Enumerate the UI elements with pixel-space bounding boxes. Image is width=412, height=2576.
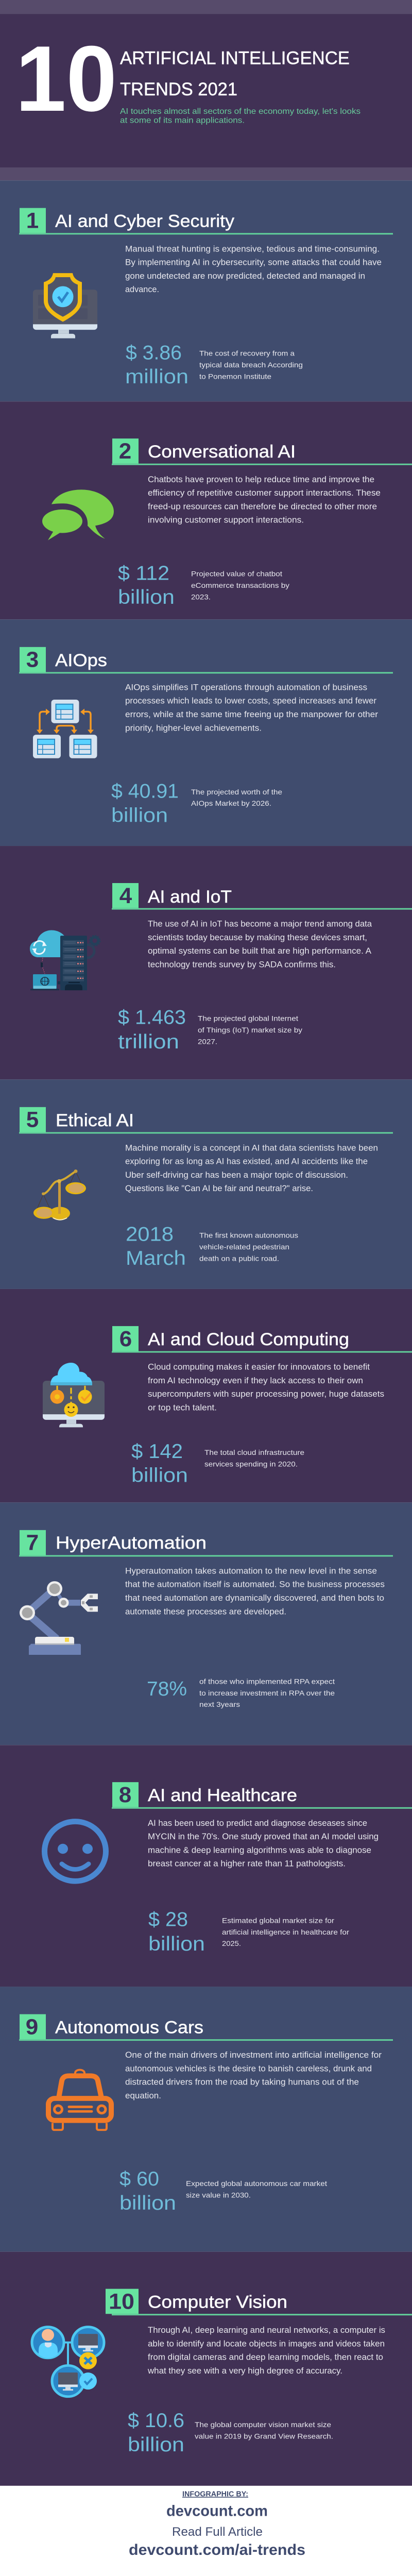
- stat description: vehicle-related pedestrian: [199, 1243, 289, 1251]
- stat description: of Things (IoT) market size by: [198, 1026, 303, 1035]
- body text: AI has been used to predict and diagnose deseases since: [148, 1818, 367, 1828]
- panel: 7 HyperAutomation: [0, 1502, 412, 1745]
- body text: MYCIN in the 70's. One study proved that an AI model using: [148, 1831, 379, 1841]
- stat value: $ 60: [119, 2168, 159, 2190]
- body text: able to identify and locate objects in images and videos taken: [148, 2338, 385, 2348]
- body text: Machine morality is a concept in AI that data scientists have been: [125, 1143, 378, 1153]
- section heading 9: Autonomous Cars: [55, 2018, 203, 2037]
- stat description: to increase investment in RPA over the: [199, 1689, 335, 1698]
- site name: devcount.com: [166, 2503, 268, 2519]
- stat description: The projected global Internet: [198, 1015, 298, 1023]
- stat description: The cost of recovery from a: [199, 350, 295, 358]
- body text: or top tech talent.: [148, 1402, 217, 1412]
- icon: linked data tables: [33, 700, 97, 758]
- body text: scientists today because by making these devices smart,: [148, 932, 367, 942]
- section heading 6: AI and Cloud Computing: [148, 1330, 349, 1349]
- stat description: typical data breach According: [199, 361, 303, 369]
- section heading 5: 5: [26, 1108, 39, 1132]
- body text: automate these processes are developed.: [125, 1606, 286, 1616]
- body text: that need automation are dynamically discovered, and then bots to: [125, 1592, 384, 1603]
- stat value: billion: [111, 804, 168, 826]
- stat description: The total cloud infrastructure: [204, 1449, 304, 1457]
- section heading 6: 6: [119, 1327, 132, 1351]
- section heading 9: 9: [26, 2015, 38, 2039]
- body text: Questions like "Can AI be fair and neutral?" arise.: [125, 1183, 313, 1193]
- stat value: 78%: [147, 1677, 187, 1700]
- body text: [125, 1143, 378, 1193]
- stat description: [195, 2421, 333, 2441]
- icon: shield on monitor: [33, 273, 97, 338]
- stat description: 2023.: [191, 594, 211, 601]
- stat value: trillion: [118, 1031, 179, 1053]
- panel: footer credits: [0, 2486, 412, 2576]
- stat value: $ 1.463: [118, 1006, 186, 1028]
- panel: 5 Ethical AI: [0, 1079, 412, 1289]
- section heading 1: [19, 208, 393, 234]
- stat description: [191, 570, 290, 601]
- body text: involving customer support interactions.: [148, 515, 304, 525]
- panel: 2 Conversational AI: [0, 401, 412, 619]
- stat value: [118, 562, 175, 608]
- icon: smiley face: [44, 1822, 106, 1881]
- section heading 4: 4: [119, 884, 132, 908]
- panel: 1 AI and Cyber Security: [0, 180, 412, 401]
- section heading 5: Ethical AI: [56, 1111, 134, 1130]
- stat description: 2027.: [198, 1038, 217, 1046]
- stat description: death on a public road.: [199, 1255, 279, 1263]
- stat description: size value in 2030.: [186, 2192, 251, 2200]
- body text: exploring for as long as AI has existed, and AI accidents like the: [125, 1156, 368, 1166]
- stat value: $ 40.91: [111, 780, 179, 803]
- stat description: [222, 1917, 349, 1948]
- subtitle: at some of its main applications.: [120, 116, 245, 125]
- section heading 4: [112, 883, 412, 910]
- article link: devcount.com/ai-trends: [129, 2542, 305, 2558]
- stat description: [198, 1015, 303, 1046]
- section heading 10: [106, 2289, 412, 2315]
- read full article label: Read Full Article: [172, 2525, 263, 2539]
- stat description: eCommerce transactions by: [191, 582, 290, 590]
- stat value: $ 142: [131, 1440, 183, 1463]
- section heading 7: 7: [26, 1531, 39, 1555]
- section heading 2: Conversational AI: [148, 443, 296, 462]
- body text: Through AI, deep learning and neural networks, a computer is: [148, 2325, 385, 2335]
- icon: cloud with monitor: [43, 1363, 105, 1427]
- stat description: Expected global autonomous car market: [186, 2180, 327, 2188]
- section heading 9: [19, 2014, 393, 2041]
- panel: header: [0, 0, 412, 180]
- section heading 3: [19, 647, 393, 673]
- body text: from AI technology even if they lack access to their own: [148, 1375, 363, 1385]
- section heading 2: [112, 438, 412, 465]
- stat description: [199, 350, 303, 381]
- stat description: value in 2019 by Grand View Research.: [195, 2433, 333, 2441]
- body text: errors, while at the same time freeing up the manpower for other: [125, 709, 378, 719]
- body text: autonomous vehicles is the desire to banish careless, drunk and: [125, 2063, 372, 2073]
- stat description: The projected worth of the: [191, 788, 282, 796]
- body text: technology trends survey by SADA confirms this.: [148, 959, 336, 969]
- panel: 3 AIOps: [0, 619, 412, 846]
- section heading 10: 10: [109, 2290, 134, 2314]
- body text: optimal systems can be built that are high performance. A: [148, 945, 371, 956]
- section heading 3: 3: [26, 648, 39, 672]
- stat description: [186, 2180, 327, 2200]
- stat value: [148, 1908, 205, 1955]
- stat value: billion: [148, 1933, 205, 1955]
- stat description: The first known autonomous: [199, 1232, 298, 1240]
- body text: [148, 1362, 384, 1412]
- body text: breast cancer at a higher rate than 11 pathologists.: [148, 1858, 346, 1869]
- body text: advance.: [125, 284, 159, 294]
- body text: [147, 2325, 385, 2376]
- stat value: $ 28: [148, 1908, 188, 1930]
- body text: processes which leads to lower costs, speed increases and fewer: [125, 696, 376, 706]
- body text: [148, 474, 381, 525]
- stat description: services spending in 2020.: [204, 1460, 298, 1468]
- body text: Chatbots have proven to help reduce time and improve the: [148, 474, 374, 484]
- body text: freed-up resources can therefore be directed to other more: [148, 501, 377, 511]
- body text: machine & deep learning algorithms was able to diagnose: [148, 1845, 371, 1855]
- section heading 6: [112, 1326, 412, 1352]
- body text: from digital cameras and deep learning models, then react to: [148, 2352, 383, 2362]
- title: ARTIFICIAL INTELLIGENCE: [120, 48, 350, 68]
- body text: gone undetected are now predicted, detected and managed in: [125, 270, 365, 281]
- stat value: March: [126, 1247, 186, 1269]
- big number 10: 10: [15, 26, 117, 130]
- body text: [125, 682, 378, 733]
- subtitle: [120, 107, 360, 125]
- body text: that the automation itself is automated. So the business processes: [125, 1579, 385, 1589]
- panel: 4 AI and IoT: [0, 846, 412, 1079]
- stat description: of those who implemented RPA expect: [199, 1678, 335, 1686]
- stat value: 2018: [126, 1223, 174, 1245]
- stat description: [204, 1449, 304, 1468]
- body text: [148, 919, 372, 969]
- icon: cloud server and laptop: [30, 930, 100, 990]
- stat description: [199, 1678, 335, 1709]
- subtitle: AI touches almost all sectors of the economy today, let's looks: [120, 107, 360, 116]
- panel: 10 Computer Vision: [0, 2252, 412, 2486]
- stat value: [119, 2168, 176, 2214]
- panel: 9 Autonomous Cars: [0, 1987, 412, 2252]
- section heading 2: 2: [119, 439, 131, 464]
- credit label: INFOGRAPHIC BY:: [182, 2490, 248, 2498]
- stat description: [199, 1232, 298, 1263]
- body text: [125, 1566, 385, 1616]
- section heading 1: 1: [26, 209, 39, 233]
- body text: supercomputers with super processing power, huge datasets: [148, 1388, 384, 1399]
- icon: golden scales: [33, 1170, 86, 1220]
- title: TRENDS 2021: [120, 79, 237, 99]
- body text: efficiency of repetitive customer support interactions. These: [148, 487, 381, 498]
- body text: priority, higher-level achievements.: [125, 723, 262, 733]
- stat value: [128, 2410, 184, 2456]
- body text: [125, 2049, 382, 2100]
- section heading 4: AI and IoT: [148, 887, 232, 907]
- stat description: to Ponemon Institute: [199, 373, 271, 381]
- section heading 8: AI and Healthcare: [148, 1786, 297, 1805]
- body text: [148, 1818, 379, 1869]
- stat description: The global computer vision market size: [195, 2421, 331, 2429]
- section heading 10: Computer Vision: [148, 2293, 287, 2312]
- stat value: billion: [119, 2192, 176, 2214]
- section heading 3: AIOps: [55, 651, 107, 670]
- stat value: billion: [131, 1464, 188, 1486]
- stat description: next 3years: [199, 1701, 240, 1709]
- body text: what they see with a very high degree of accuracy.: [147, 2365, 342, 2376]
- body text: Manual threat hunting is expensive, tedious and time-consuming.: [125, 244, 380, 253]
- stat value: [118, 1006, 186, 1053]
- stat value: $ 3.86: [126, 342, 182, 364]
- section heading 8: [112, 1782, 412, 1809]
- stat value: [111, 780, 179, 826]
- title: [120, 48, 350, 99]
- stat value: $ 10.6: [128, 2410, 184, 2432]
- stat description: Projected value of chatbot: [191, 570, 282, 579]
- icon: robot arm: [20, 1581, 98, 1655]
- stat value: billion: [128, 2433, 184, 2456]
- icon: car: [48, 2070, 111, 2130]
- stat value: [131, 1440, 188, 1486]
- body text: equation.: [125, 2090, 161, 2100]
- stat value: billion: [118, 586, 175, 608]
- stat value: [126, 1223, 186, 1269]
- body text: Uber self-driving car has been a major topic of discussion.: [125, 1170, 348, 1180]
- stat value: million: [125, 366, 188, 388]
- section heading 7: [19, 1530, 393, 1556]
- stat description: [191, 788, 282, 808]
- icon: network of people and computers: [32, 2327, 104, 2397]
- body text: Hyperautomation takes automation to the new level in the sense: [125, 1566, 377, 1575]
- stat value: $ 112: [118, 562, 169, 584]
- body text: [125, 244, 382, 294]
- body text: By implementing AI in cybersecurity, some attacks that could have: [125, 257, 382, 267]
- section heading 7: HyperAutomation: [56, 1533, 207, 1553]
- body text: distracted drivers from the road by taking humans out of the: [125, 2077, 359, 2087]
- stat description: artificial intelligence in healthcare for: [222, 1928, 349, 1937]
- stat description: 2025.: [222, 1940, 241, 1948]
- panel: 6 AI and Cloud Computing: [0, 1289, 412, 1502]
- panel: 8 AI and Healthcare: [0, 1745, 412, 1987]
- stat value: [125, 342, 188, 388]
- section heading 8: 8: [119, 1783, 131, 1807]
- body text: Cloud computing makes it easier for innovators to benefit: [148, 1362, 370, 1372]
- stat description: Estimated global market size for: [222, 1917, 334, 1925]
- section heading 1: AI and Cyber Security: [55, 212, 235, 231]
- section heading 5: [19, 1107, 393, 1133]
- body text: One of the main drivers of investment into artificial intelligence for: [125, 2049, 382, 2060]
- body text: AIOps simplifies IT operations through automation of business: [125, 682, 367, 692]
- body text: The use of AI in IoT has become a major trend among data: [148, 919, 372, 929]
- icon: speech bubbles: [42, 489, 114, 540]
- stat description: AIOps Market by 2026.: [191, 800, 271, 808]
